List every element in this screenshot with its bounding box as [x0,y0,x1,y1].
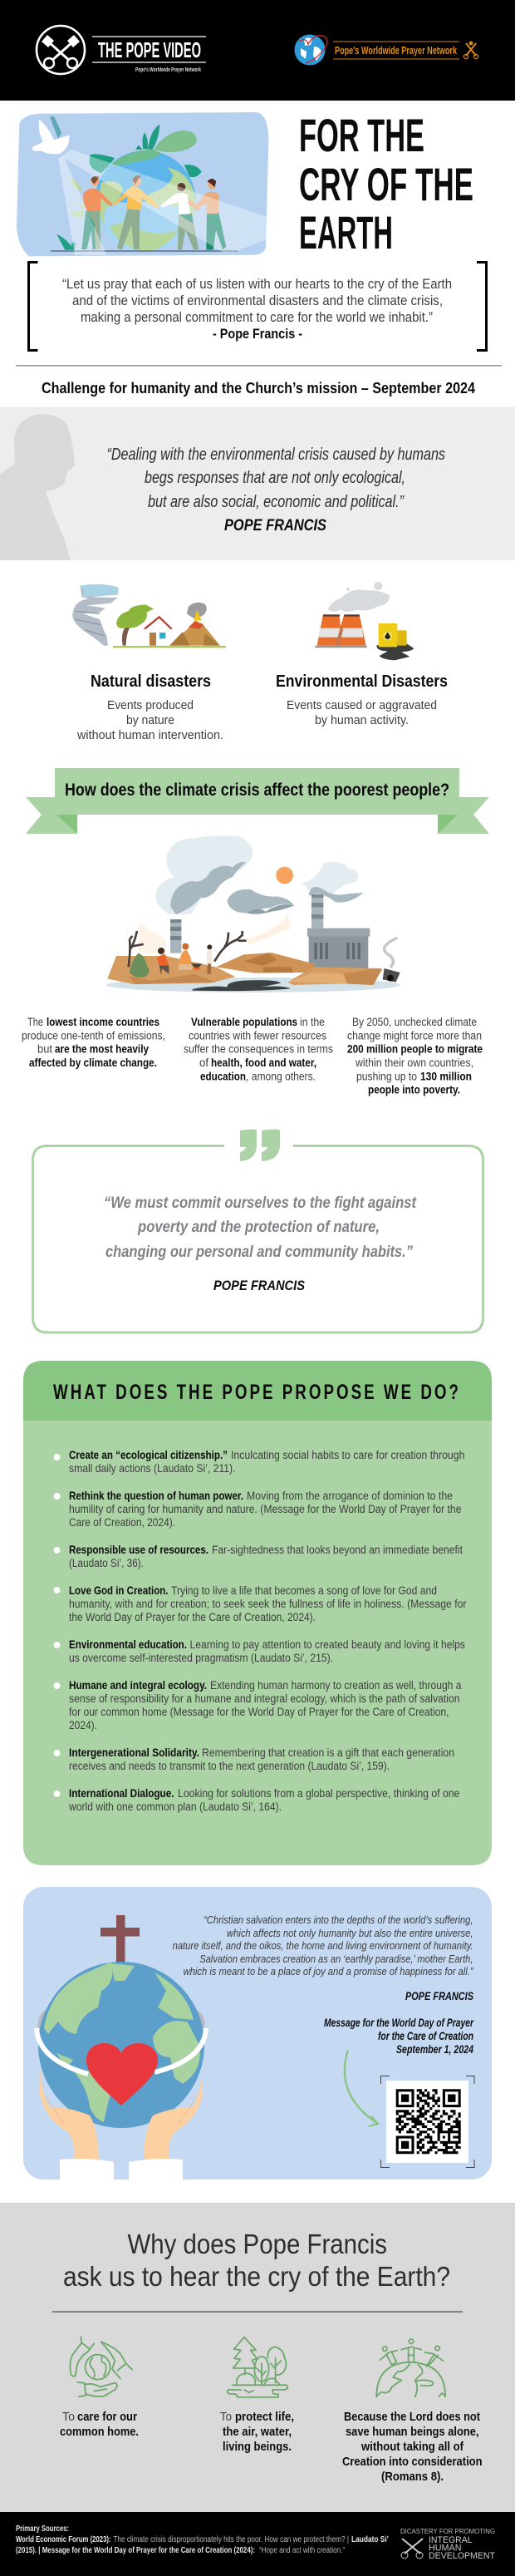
item: intergenerational solidarity [53,1746,454,1772]
panel: Pope Francis quote on crisis: begs responses that are not only ecological, [145,469,405,487]
icon: quotation marks [240,1129,280,1161]
fact: migration by 2050: people into poverty. [368,1084,460,1096]
icon: Pope silhouette [0,414,75,560]
banner heading [26,768,489,834]
divider and monthly subtitle: Challenge for humanity and the Church’s mission – September 2024 [42,380,475,396]
reason: care for home: To [62,2410,75,2424]
fact: vulnerable populations: Vulnerable populations [191,1016,297,1028]
quote text: which affects not only humanity but also the entire universe, [227,1927,473,1939]
natural disasters text: Natural disasters [91,672,211,691]
fact: lowest income: The [27,1016,43,1028]
item: intergenerational solidarity: receives and needs to transmit to the next generation (Laudato Si’, 159). [69,1760,390,1772]
icon: people on globe [376,2339,445,2396]
title: EARTH [299,206,393,259]
item: international dialogue: International Dialogue. [69,1787,174,1800]
quote text: POPE FRANCIS [405,1989,474,2002]
logo: Pope's Worldwide Prayer Network [294,35,478,65]
QR code [380,2076,474,2168]
item: responsible use: (Laudato Si’, 36). [69,1557,144,1569]
icon: hands around globe [70,2337,132,2396]
reason: the Lord saves all creation: Because the Lord does not [344,2410,480,2424]
reason: care for home: common home. [60,2425,139,2439]
item: human power [53,1490,462,1529]
fact: vulnerable populations: education [200,1070,246,1082]
reason: protect life: living beings. [223,2440,292,2454]
fact: vulnerable populations: countries with fewer resources [189,1029,326,1042]
item: humane and integral ecology: Extending human harmony to creation as well, through a [210,1679,462,1692]
reason: protect life: To [220,2410,232,2424]
three facts [22,1016,483,1096]
reason: the Lord saves all creation: Creation into consideration [342,2455,482,2469]
reason: care for home [60,2410,139,2439]
fact: lowest income: produce one-tenth of emissions, [22,1029,165,1042]
item: responsible use [53,1544,463,1569]
icon: environmental disasters [315,582,414,660]
environmental disasters text: by human activity. [315,713,409,727]
fact: lowest income [22,1016,165,1069]
item: humane and integral ecology: sense of responsibility for a humane and integral ecology, which is the path of salvation [69,1692,460,1705]
fact: migration by 2050 [347,1016,483,1096]
reason: care for home: care for our [77,2410,137,2424]
prayer quote in brackets: “Let us pray that each of us listen with our hearts to the cry of the Earth [62,277,452,292]
item: ecological citizenship [53,1449,465,1475]
logo: Dicastery: HUMAN [429,2544,462,2554]
panel: Pope Francis quote on crisis [0,407,515,560]
primary sources [16,2524,389,2555]
fact: vulnerable populations: health, food and water, [211,1057,316,1069]
item: intergenerational solidarity: Remembering that creation is a gift that each generation [202,1746,454,1759]
illustration: pollution and poor communities [106,835,400,992]
logo: Dicastery: DICASTERY FOR PROMOTING [400,2527,495,2535]
item: humane and integral ecology: 2024). [69,1719,97,1731]
fact: vulnerable populations [184,1016,333,1082]
panel: Pope Francis quote on crisis: “Dealing with the environmental crisis caused by humans [106,446,445,464]
illustration: globe held by hands with heart and cross [37,1915,206,2180]
quote text: September 1, 2024 [396,2043,473,2056]
item: environmental education [53,1638,465,1664]
two definitions [76,672,448,742]
logo: Dicastery: INTEGRAL [429,2535,473,2545]
primary sources: The climate crisis disproportionately hits the poor. How can we protect them? | [113,2535,349,2544]
natural disasters text: Events produced [107,698,194,712]
callout: quote box: poverty and the protection of nature, [137,1218,380,1236]
primary sources: Primary Sources: [16,2524,69,2534]
logo: Dicastery: DEVELOPMENT [429,2551,495,2561]
section heading [63,2229,450,2292]
fact: lowest income: affected by climate change. [29,1057,157,1069]
environmental disasters text: Environmental Disasters [276,672,448,691]
fact: lowest income: but [37,1043,52,1056]
item: intergenerational solidarity: Intergenerational Solidarity. [69,1746,199,1759]
item: love God in creation [53,1584,467,1623]
item: love God in creation: the World Day of Prayer for the Care of Creation, 2024). [69,1611,316,1623]
item: responsible use: Responsible use of resources. [69,1544,208,1556]
quote text: which is meant to be a place of joy and a promise of happiness for all.” [184,1965,473,1978]
icon: trees and pond [228,2337,287,2397]
fact: vulnerable populations: of [199,1057,208,1069]
fact: migration by 2050: By 2050, unchecked climate [352,1016,477,1028]
reason: protect life: protect life, [235,2410,294,2424]
fact: migration by 2050: 200 million people to migrate [347,1043,483,1056]
hero illustration: people and globe [17,112,268,256]
quote text: Message for the World Day of Prayer [324,2017,474,2029]
logo: The Pope Video: THE POPE VIDEO [98,37,201,62]
reason: the Lord saves all creation: without taking all of [360,2440,464,2454]
fact: migration by 2050: change might force more than [347,1029,482,1042]
icon: right hand and sleeve [129,2068,203,2180]
fact: lowest income: are the most heavily [55,1043,149,1056]
natural disasters text: without human intervention. [76,728,223,742]
item: human power: humility of caring for humanity and nature. (Message for the World Day of Prayer for the [69,1503,462,1515]
natural disasters text: by nature [126,713,174,727]
section heading: ask us to hear the cry of the Earth? [63,2261,450,2292]
panel: what the Pope proposes [23,1361,492,1865]
icon: left hand and sleeve [40,2068,114,2180]
prayer quote in brackets: - Pope Francis - [213,327,302,342]
primary sources: World Economic Forum (2023): [16,2535,111,2544]
item: international dialogue: Looking for solutions from a global perspective, thinking of one [178,1787,460,1800]
logo: The Pope Video: Pope's Worldwide Prayer Network [135,67,201,73]
logo: Pope's Worldwide Prayer Network: Pope's Worldwide Prayer Network [335,45,457,57]
footer [0,2512,515,2576]
item: responsible use: Far-sightedness that looks beyond an immediate benefit [212,1544,463,1556]
callout: quote box: changing our personal and community habits.” [105,1243,413,1261]
panel: Christian salvation quote [23,1887,492,2180]
item: human power: Rethink the question of human power. [69,1490,243,1502]
quote text [173,1914,474,2056]
natural disasters text [76,672,223,742]
quote text: nature itself, and the oikos, the home and living environment of humanity. [173,1939,473,1952]
item: ecological citizenship: small daily actions (Laudato Si’, 211). [69,1462,236,1475]
item: international dialogue [53,1787,460,1813]
reason: the Lord saves all creation: (Romans 8). [381,2470,444,2484]
title: FOR THE [299,109,424,161]
prayer quote in brackets: making a personal commitment to care for the world we inhabit.” [81,310,433,325]
reason: protect life: the air, water, [223,2425,292,2439]
icon: natural disasters [72,584,226,648]
reason: the Lord saves all creation: save human beings alone, [346,2425,478,2439]
title [299,109,473,259]
icon: heart [86,2043,158,2106]
callout: quote box: “We must commit ourselves to the fight against [104,1194,417,1212]
fact: vulnerable populations: in the [300,1016,325,1028]
primary sources: (2015). | Message for the World Day of Prayer for the Care of Creation (2024): [16,2546,255,2555]
item: love God in creation: Trying to live a life that becomes a song of love for God and [171,1584,437,1597]
fact: lowest income: lowest income countries [47,1016,159,1028]
quote text: Salvation embraces creation as an ‘earthly paradise,’ mother Earth, [199,1953,473,1965]
callout: quote box: POPE FRANCIS [213,1278,306,1293]
reason: the Lord saves all creation [342,2410,482,2484]
item: humane and integral ecology: for our common home (Message for the World Day of Prayer for the Care of Creation, [69,1706,449,1718]
quote text: for the Care of Creation [378,2030,473,2042]
item: human power: Care of Creation, 2024). [69,1516,175,1529]
item: ecological citizenship: Create an “ecological citizenship.” [69,1449,228,1461]
fact: migration by 2050: 130 million [420,1070,472,1082]
panel: Pope Francis quote on crisis: POPE FRANCIS [224,517,326,534]
environmental disasters text: Events caused or aggravated [287,698,437,712]
logo: The Pope Video [37,26,206,74]
item: international dialogue: world with one common plan (Laudato Si’, 164). [68,1800,282,1813]
reason: protect life [220,2410,294,2454]
item: environmental education: Learning to pay attention to created beauty and loving it helps [189,1638,465,1651]
primary sources: Laudato Si’ [351,2535,389,2544]
fact: vulnerable populations: suffer the consequences in terms [184,1043,333,1056]
prayer quote in brackets [28,263,487,351]
item: humane and integral ecology [53,1679,462,1731]
panel: Pope Francis quote on crisis: but are also social, economic and political.” [148,493,405,511]
prayer quote in brackets: and of the victims of environmental disasters and the climate crisis, [72,293,443,308]
fact: vulnerable populations: , among others. [246,1070,316,1082]
section: why does Pope Francis ask [0,2203,515,2512]
header bar [0,0,515,101]
item: love God in creation: humanity, with and for creation; to seek seek the fullness of life in holiness. (Message for [69,1598,467,1610]
primary sources: “Hope and act with creation.” [259,2546,345,2555]
item: human power: Moving from the arrogance of dominion to the [247,1490,453,1502]
callout: quote box [33,1129,483,1332]
item: love God in creation: Love God in Creation. [69,1584,168,1597]
item: humane and integral ecology: Humane and integral ecology. [69,1679,207,1692]
item: environmental education: Environmental education. [69,1638,187,1651]
fact: migration by 2050: pushing up to [356,1070,417,1082]
fact: migration by 2050: within their own countries, [355,1057,473,1069]
item: environmental education: us overcome self-interested pragmatism (Laudato Si’, 215). [69,1652,333,1664]
section heading: Why does Pope Francis [128,2229,387,2259]
arrow to QR code [345,2050,378,2126]
quote text: “Christian salvation enters into the depths of the world’s suffering, [204,1914,473,1926]
banner heading: How does the climate crisis affect the poorest people? [65,781,449,800]
logo: Dicastery [400,2527,495,2561]
item: ecological citizenship: Inculcating social habits to care for creation through [231,1449,465,1461]
environmental disasters text [276,672,448,727]
